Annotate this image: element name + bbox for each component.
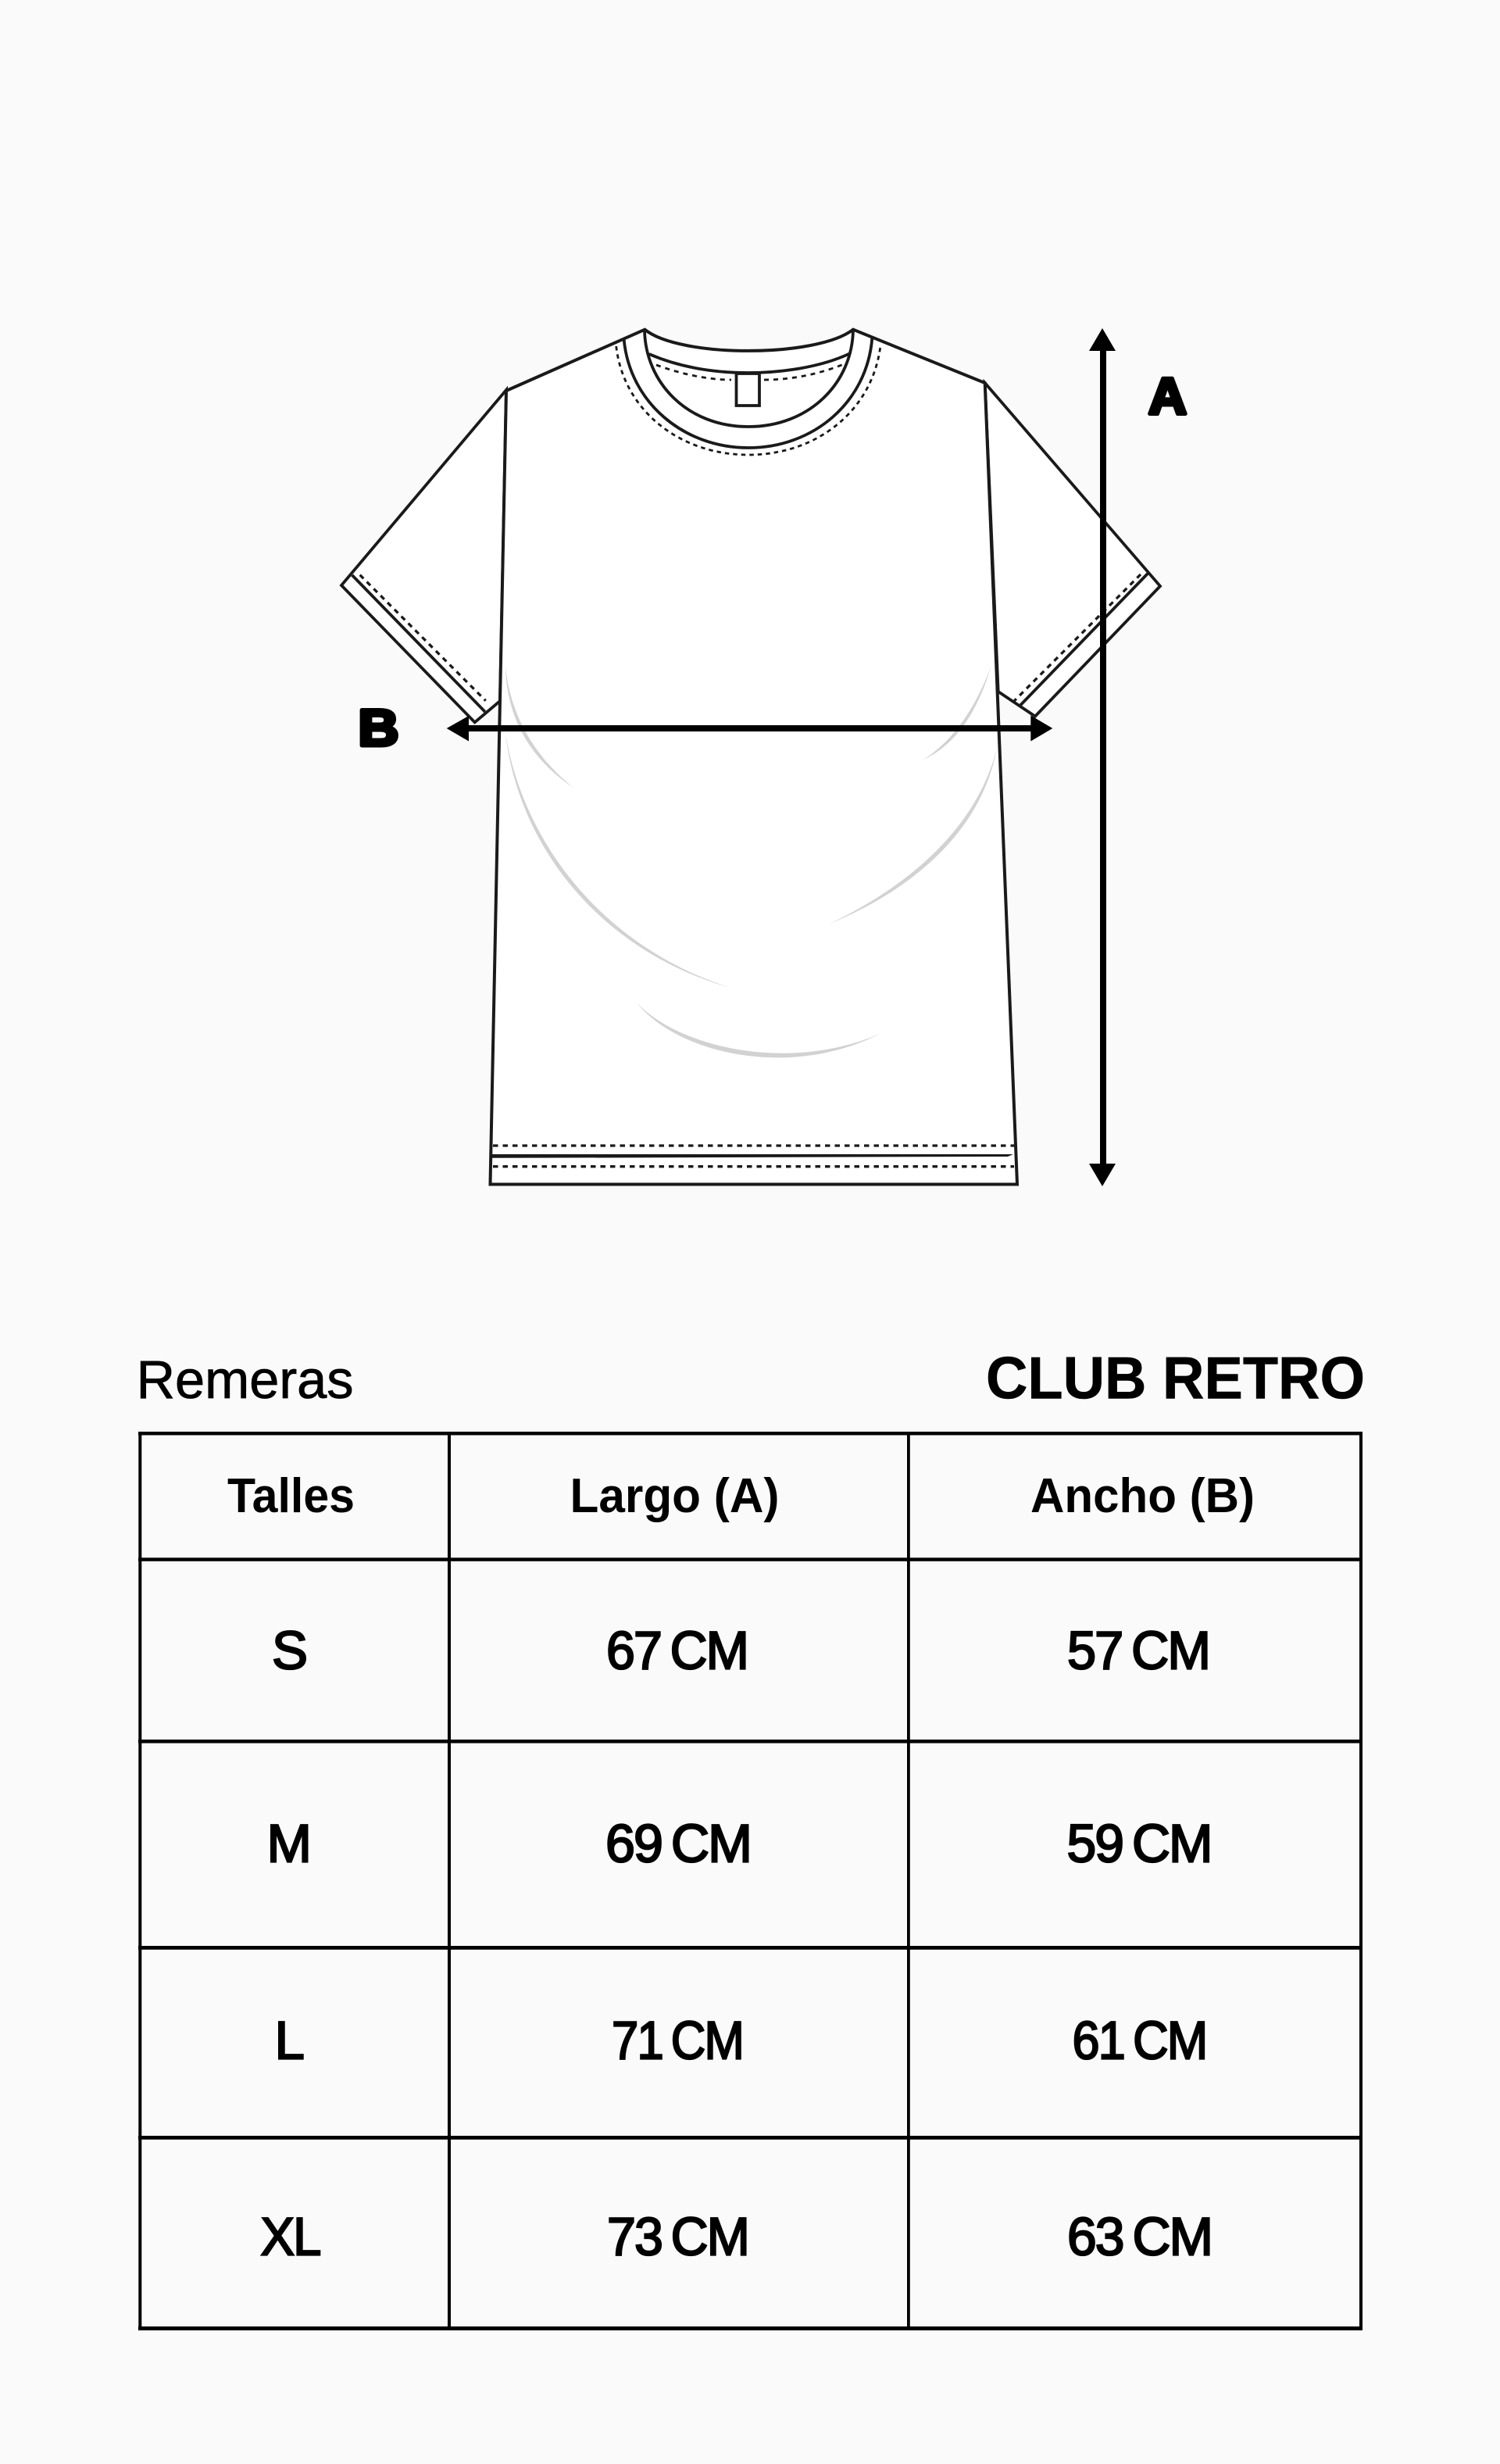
- table grid: [138, 1432, 1362, 2330]
- row XL: [261, 2207, 1212, 2266]
- row L: [275, 2010, 1206, 2071]
- header row: [227, 1469, 1255, 1523]
- row M: 69 CM: [605, 1813, 751, 1874]
- row M: M: [267, 1813, 312, 1874]
- right sleeve: [985, 383, 1160, 717]
- row M: [267, 1813, 1211, 1874]
- collar: [616, 330, 880, 455]
- heading: Remeras: Remeras: [137, 1350, 353, 1410]
- hem: [492, 1146, 1014, 1167]
- label A: A: [1148, 367, 1187, 425]
- neck label: [736, 374, 759, 406]
- header row: Largo (A): [570, 1469, 780, 1523]
- row S: 67 CM: [606, 1621, 748, 1680]
- row XL: 63 CM: [1067, 2207, 1212, 2266]
- left sleeve: [341, 390, 506, 722]
- row XL: XL: [261, 2207, 320, 2266]
- label B: B: [358, 699, 398, 756]
- row S: 57 CM: [1067, 1621, 1209, 1680]
- heading: CLUB RETRO: CLUB RETRO: [986, 1345, 1365, 1411]
- row S: S: [272, 1621, 308, 1680]
- header row: Ancho (B): [1030, 1469, 1255, 1523]
- size table: [138, 1432, 1362, 2330]
- arrow B: width: [447, 716, 1052, 741]
- row L: L: [275, 2010, 305, 2071]
- row L: 71 CM: [612, 2010, 743, 2071]
- row M: 59 CM: [1067, 1813, 1211, 1874]
- row XL: 73 CM: [607, 2207, 748, 2266]
- row S: [272, 1621, 1209, 1680]
- header row: Talles: [227, 1469, 355, 1523]
- arrow A: length: [1089, 328, 1116, 1186]
- shirt body: [491, 330, 1017, 1185]
- t-shirt technical drawing: [341, 330, 1160, 1185]
- wrinkle shading: [505, 667, 997, 1057]
- row L: 61 CM: [1072, 2010, 1206, 2071]
